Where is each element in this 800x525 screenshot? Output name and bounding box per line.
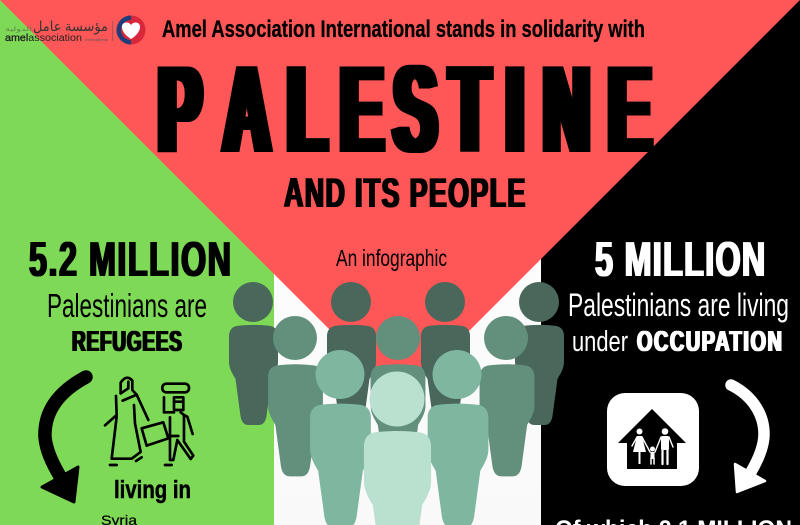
logo: Amel Association: amelassociation [5, 33, 82, 44]
logo: Amel Association [5, 16, 146, 44]
panel: green flag field [0, 0, 274, 525]
second row figures [268, 316, 534, 476]
icon: family home [607, 393, 699, 486]
arrow: right curved down [731, 385, 765, 492]
text: under occupation [572, 326, 782, 358]
text: palestinians are: Palestinians are [47, 287, 207, 324]
text: living in: living in [114, 476, 191, 504]
back row figures [229, 282, 564, 425]
panel: red flag triangle [0, 0, 800, 400]
text: under occupation: under [572, 326, 628, 358]
logo: Amel Association: الدولية [5, 26, 33, 33]
text: refugees: REFUGEES [72, 326, 182, 358]
logo: Amel Association: مؤسسة عامل [33, 18, 108, 35]
front figure [364, 372, 431, 525]
text: under occupation: OCCUPATION [637, 326, 782, 358]
subtitle: and its people: AND ITS PEOPLE [284, 170, 525, 217]
panel: white flag field [274, 0, 541, 525]
caption: an infographic: An infographic [336, 245, 447, 271]
logo: Amel Association: International [85, 38, 108, 42]
header line: Amel Association International stands in solidarity with [162, 16, 645, 43]
stat: 5.2 million: 5.2 MILLION [29, 231, 231, 287]
panel: black flag field [541, 0, 800, 525]
arrow: left curved down [42, 377, 86, 502]
third row figures [310, 350, 488, 525]
title: PALESTINE: PALESTINE [158, 40, 651, 178]
crowd of people [229, 282, 564, 525]
icon: refugees walking [105, 378, 193, 465]
stat: 5 million: 5 MILLION [595, 231, 765, 287]
